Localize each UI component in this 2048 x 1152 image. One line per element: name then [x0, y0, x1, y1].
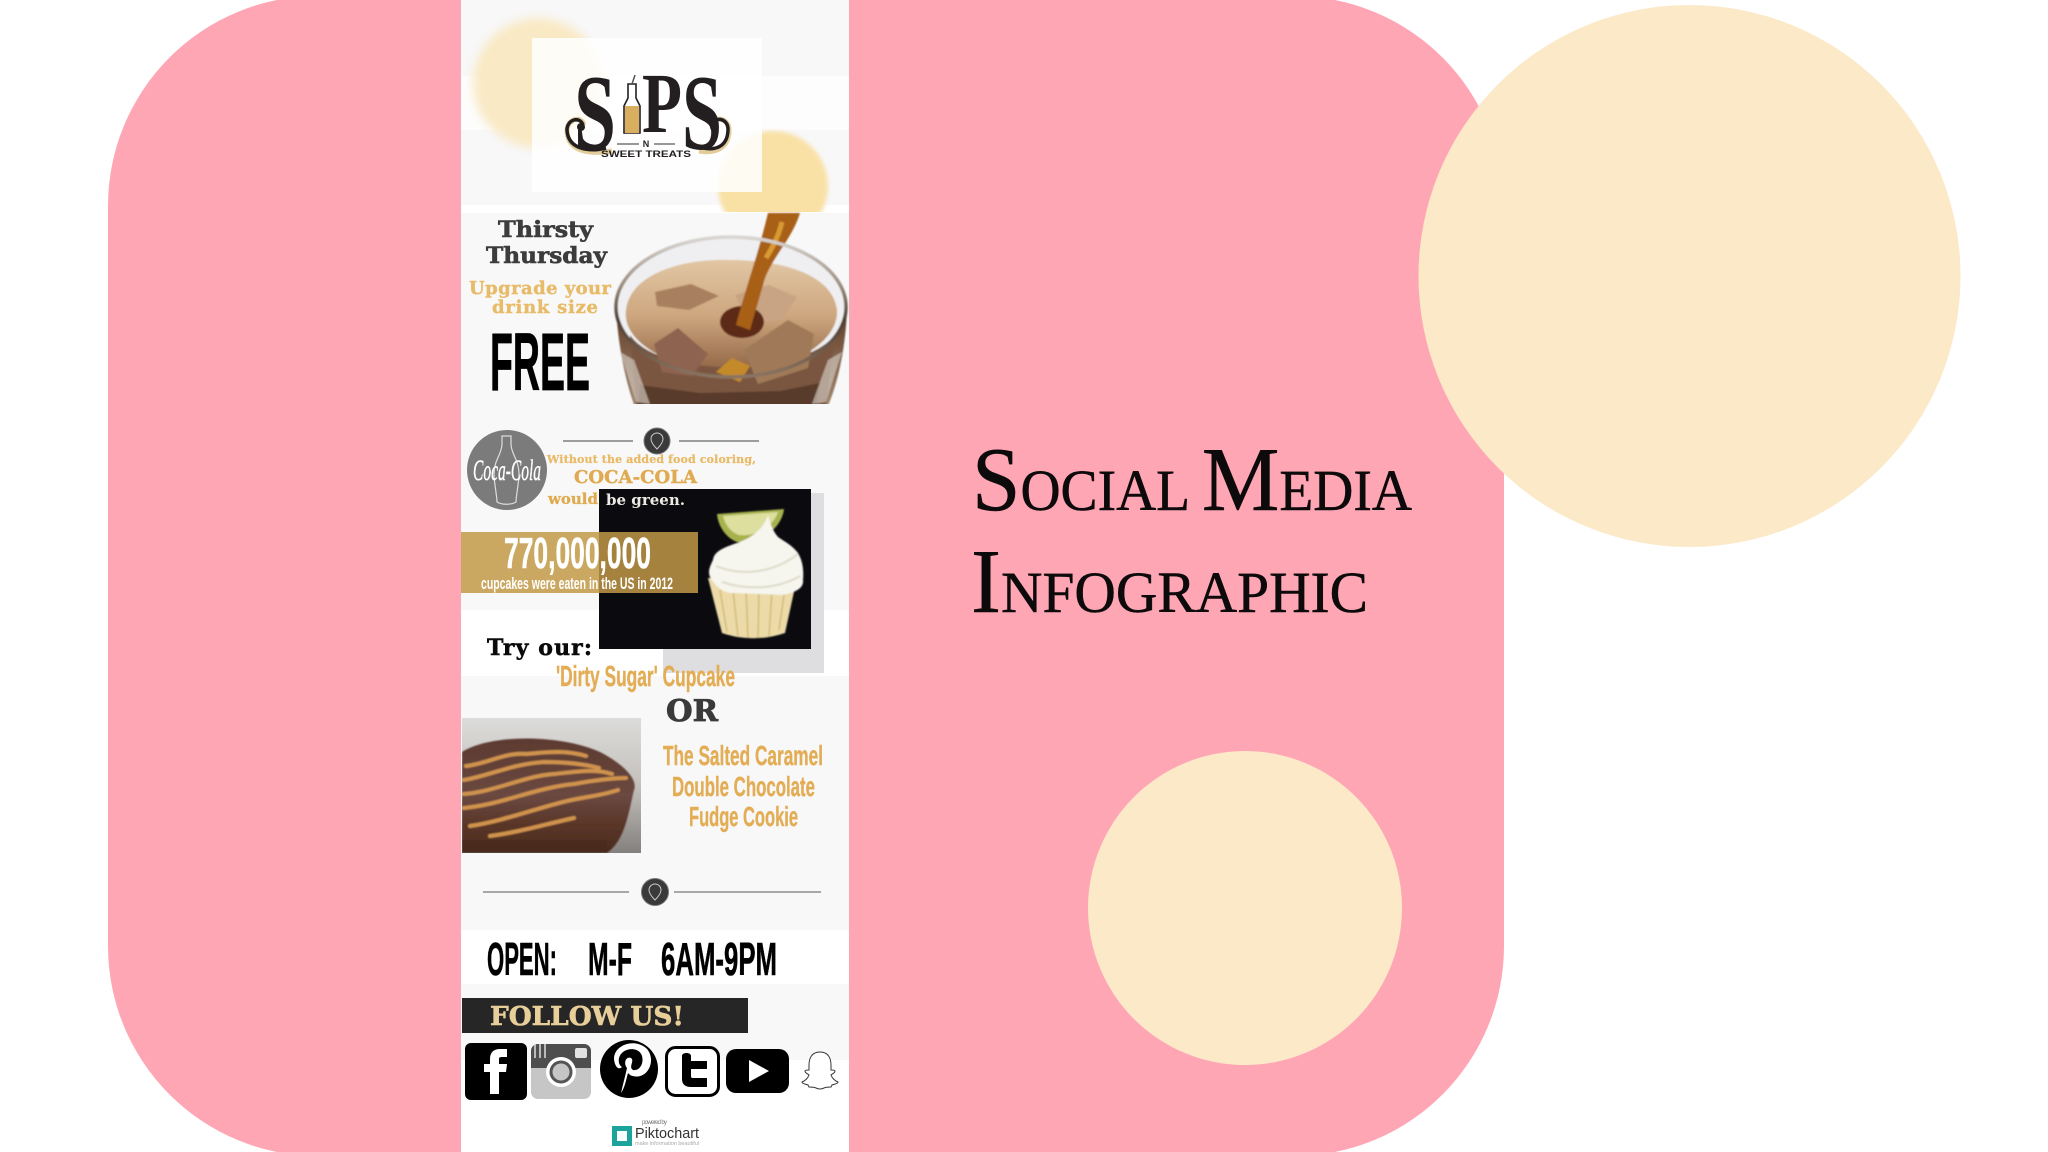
footer: Piktochart credit: powered by — [642, 1120, 667, 1126]
heading: Thirsty Thursday: Thursday — [486, 243, 608, 269]
logo: SIPS wordmark — [564, 74, 732, 157]
icon: Pinterest — [600, 1040, 658, 1098]
banner: follow us: FOLLOW US! — [490, 1002, 684, 1032]
banner: follow us — [462, 998, 748, 1033]
photo: cupcake with lime on black — [599, 489, 811, 649]
text: opening hours — [488, 942, 776, 976]
large cream circle, top right — [1418, 5, 1960, 547]
photo: salted caramel cookie — [462, 718, 641, 853]
text: opening hours: M-F — [588, 933, 632, 985]
text: would be green: would — [547, 490, 598, 508]
text: cookie name — [663, 740, 823, 832]
text: cookie name: Fudge Cookie — [689, 801, 798, 832]
text: upgrade your drink size: drink size — [492, 297, 598, 318]
text: would be green: Without the added food coloring, — [546, 453, 756, 466]
text: opening hours: 6AM-9PM — [661, 933, 777, 985]
icon: Snapchat — [802, 1052, 838, 1089]
heading: Thirsty Thursday — [486, 217, 608, 269]
logo: SIPS wordmark: N — [643, 139, 649, 149]
small cream circle, bottom — [1088, 751, 1402, 1065]
image: soda pouring into glass — [616, 213, 847, 410]
icon: Facebook — [465, 1043, 527, 1100]
text: cookie name: The Salted Caramel — [663, 740, 823, 771]
icon: YouTube — [726, 1049, 789, 1093]
decorative yellow circles behind logo — [473, 18, 828, 241]
title: Social Media Infographic: INFOGRAPHIC — [971, 531, 1368, 632]
text: OR: OR — [666, 694, 719, 729]
icon: Instagram — [531, 1044, 591, 1099]
heading: Thirsty Thursday: Thirsty — [498, 217, 594, 243]
pink rounded background shape — [108, 0, 1504, 1152]
text: upgrade your drink size — [469, 280, 612, 314]
stat band: 770,000,000 cupcakes — [461, 529, 698, 593]
text: would be green: COCA-COLA — [574, 467, 698, 488]
icon: Coca-Cola badge — [467, 430, 547, 510]
text: would be green: be green. — [606, 491, 685, 509]
stat number: 770,000,000 — [504, 529, 651, 578]
footer: Piktochart credit: make information beautiful — [635, 1141, 699, 1147]
footer: Piktochart credit: Piktochart — [635, 1125, 700, 1142]
text: would be green — [546, 453, 756, 509]
logo: SIPS wordmark: S — [682, 54, 722, 173]
logo: SIPS wordmark: SWEET TREATS — [601, 149, 691, 160]
logo card — [532, 38, 762, 192]
icon: Twitter — [666, 1048, 718, 1096]
text: cookie name: Double Chocolate — [672, 771, 815, 802]
panel: Sips N Sweet Treats poster — [461, 0, 849, 1152]
divider with pin icon, upper — [563, 428, 759, 454]
title: Social Media Infographic — [971, 429, 1412, 632]
text: Try our: Try our: — [487, 635, 592, 661]
text: opening hours: OPEN: — [487, 933, 557, 985]
logo: SIPS wordmark: P — [642, 55, 682, 151]
footer: Piktochart credit — [612, 1120, 700, 1147]
gray shadow behind cupcake photo — [663, 493, 824, 673]
text: Dirty Sugar Cupcake: 'Dirty Sugar' Cupcake — [556, 661, 735, 693]
logo: SIPS wordmark: S — [574, 54, 616, 173]
stat caption: cupcakes were eaten in the US in 2012 — [481, 574, 673, 593]
icon: Coca-Cola badge: Coca-Cola — [473, 454, 541, 487]
title: Social Media Infographic: SOCIAL MEDIA — [972, 429, 1412, 530]
text: upgrade your drink size: Upgrade your — [469, 278, 612, 299]
divider with pin icon, lower — [483, 878, 821, 906]
panel: Sips N Sweet Treats poster: FREE — [490, 317, 590, 408]
